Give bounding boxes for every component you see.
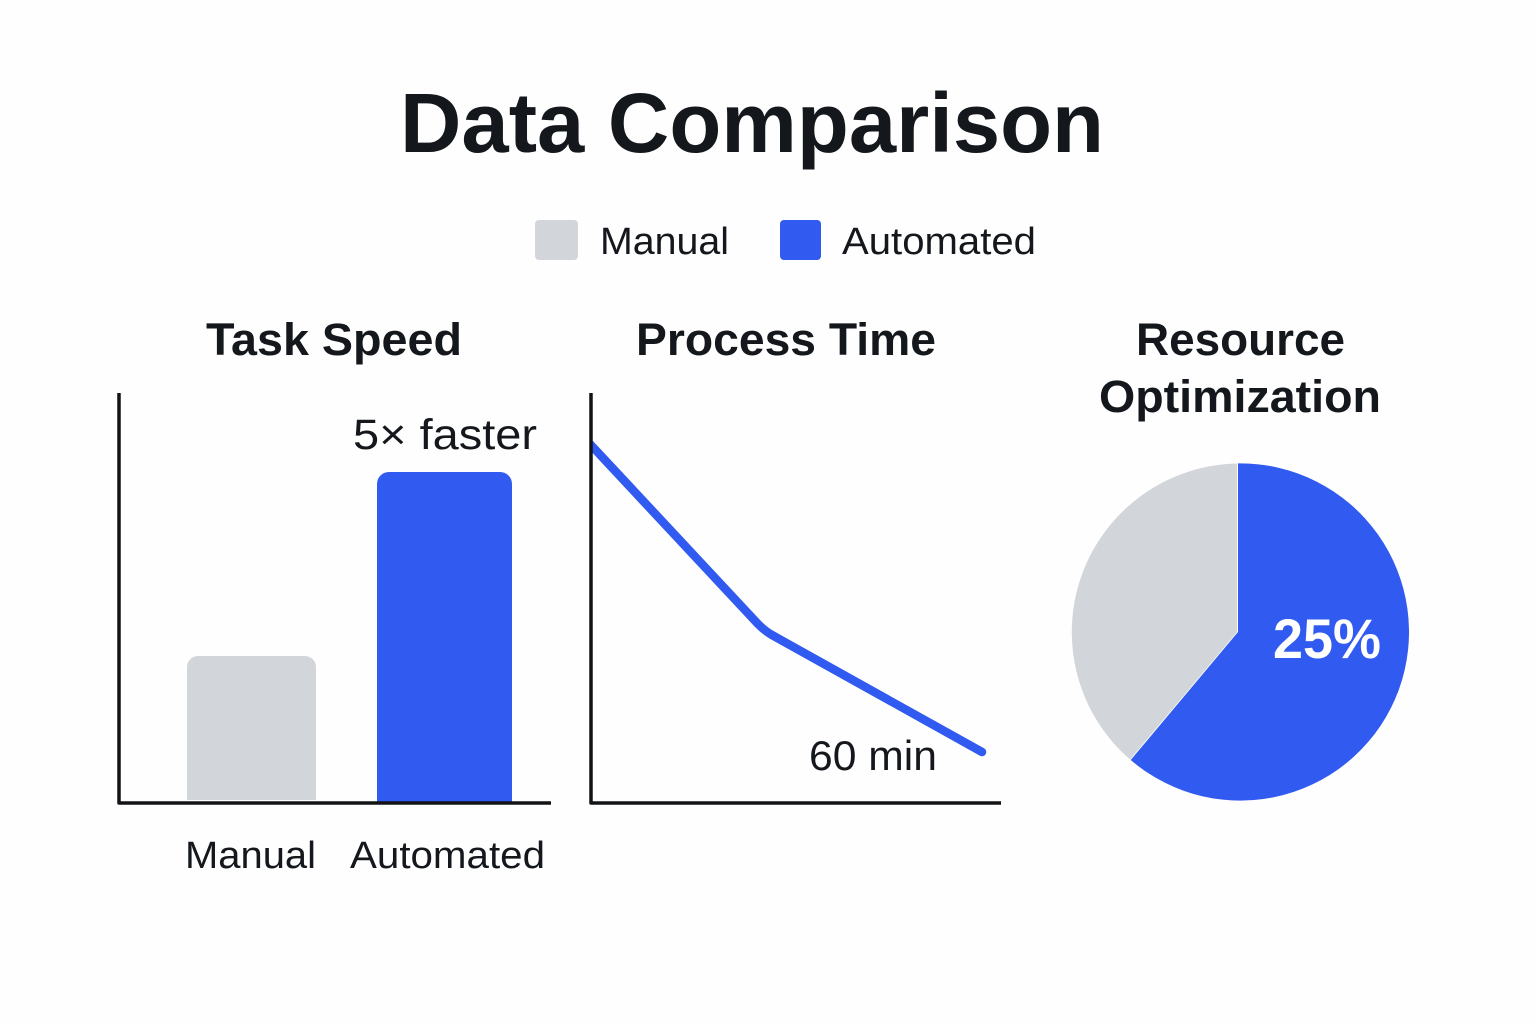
pie label: 25%: 25% xyxy=(1273,607,1381,670)
panel: task speed xyxy=(119,314,551,877)
title: Data Comparison xyxy=(400,76,1104,170)
bar: manual xyxy=(187,656,316,800)
panel: resource optimization xyxy=(1072,314,1409,801)
legend label: automated: Automated xyxy=(842,221,1036,263)
heading: process time: Process Time xyxy=(636,314,936,365)
callout: 5x faster: 5× faster xyxy=(353,411,537,459)
heading: task speed: Task Speed xyxy=(206,314,462,365)
pie slice: automated xyxy=(1131,463,1409,801)
axis label: automated: Automated xyxy=(350,835,545,877)
axis label: manual: Manual xyxy=(185,835,316,877)
panel: process time xyxy=(590,314,1001,803)
legend label: manual: Manual xyxy=(600,221,729,263)
pie slice: manual xyxy=(1072,464,1237,760)
heading: resource optimization: Optimization xyxy=(1099,371,1381,422)
heading: resource optimization: Resource xyxy=(1136,314,1345,365)
legend xyxy=(535,220,1036,263)
legend swatch: automated xyxy=(780,220,821,260)
chart axes xyxy=(591,393,1001,803)
bar: automated xyxy=(377,472,512,802)
legend swatch: manual xyxy=(535,220,578,260)
callout: 60 min: 60 min xyxy=(809,732,937,779)
chart axes xyxy=(119,393,551,803)
pie chart xyxy=(1072,463,1409,801)
line series xyxy=(590,444,982,752)
